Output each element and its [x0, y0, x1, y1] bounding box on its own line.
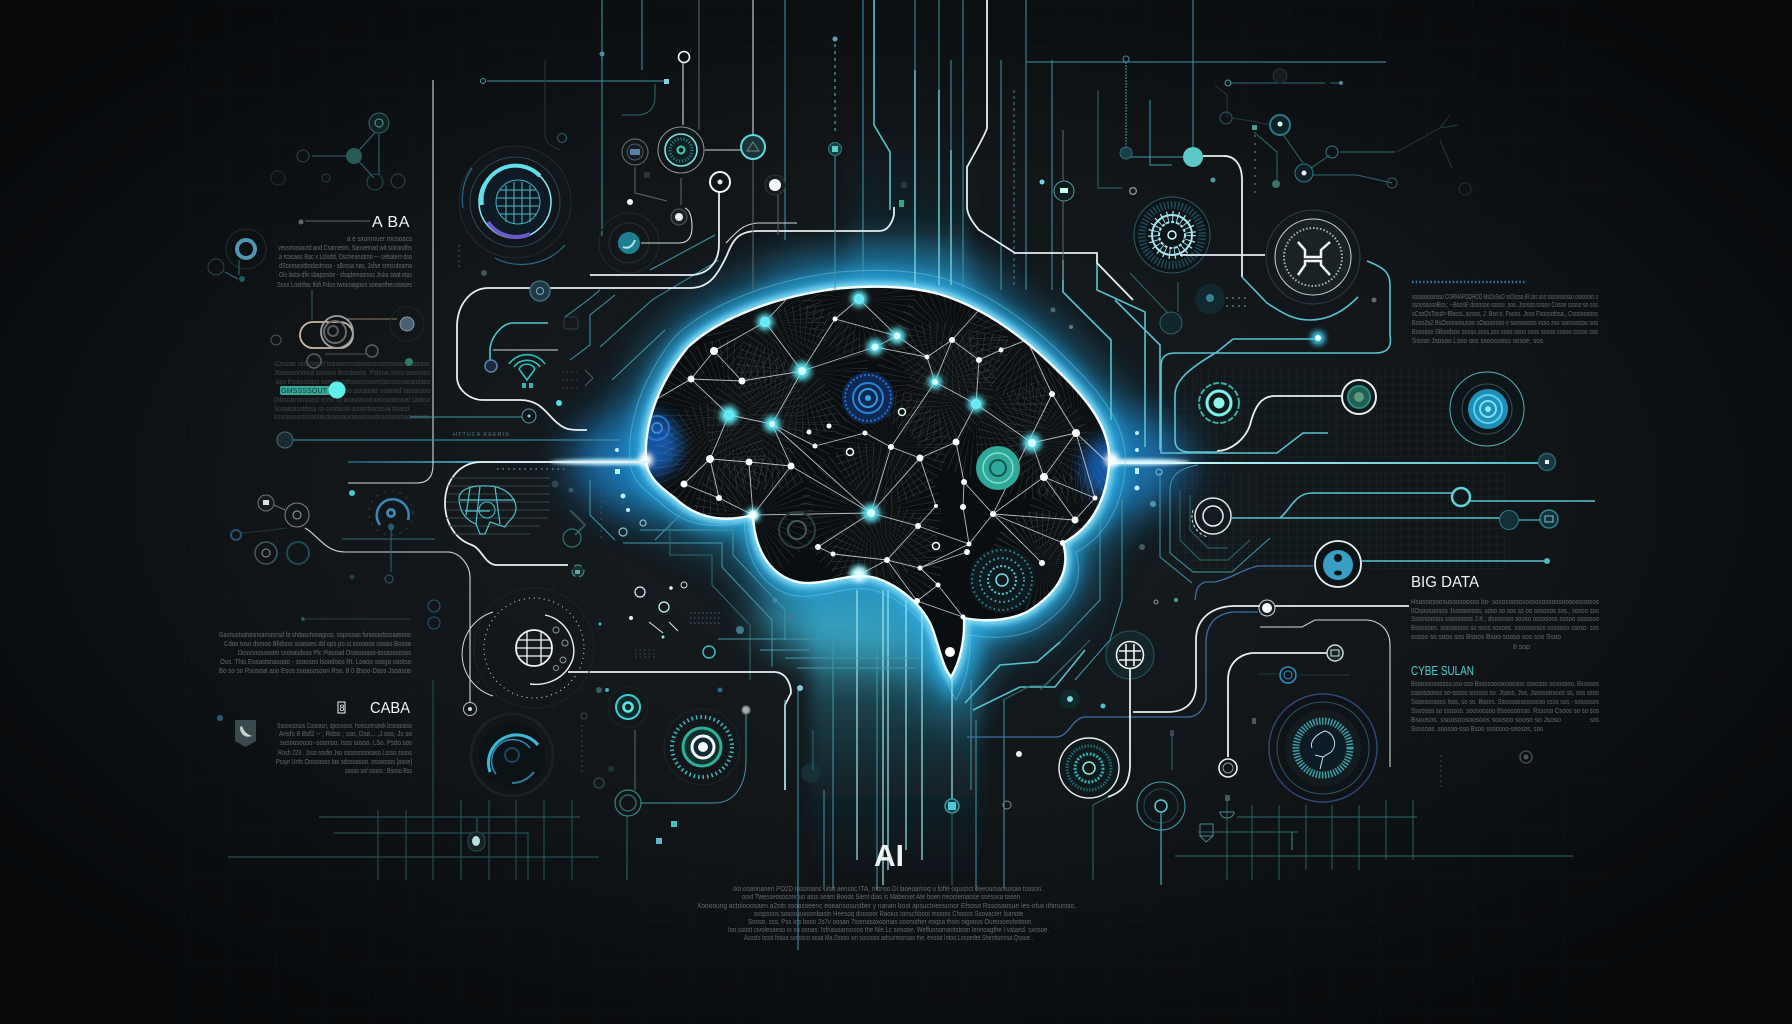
white glow node: [765, 175, 785, 235]
fine grid panels right: [1175, 370, 1505, 570]
text block: left lower two: [276, 723, 412, 775]
text block: AI: Xooooung actoiooosaen a2sto ssoasseenc eoeansosustber y nanan bost apsuctneosonor Efsoso Rssosaosue Ies-ofux ithmunsio,: [697, 903, 1076, 910]
bottom left grid: [228, 680, 599, 880]
thin upper white circuit: [726, 223, 797, 243]
right white circuit: [967, 0, 1133, 300]
text block: A BA: Sxxx Loshfas Ilsfi Fdox twoxnagoos soeanthecotases: [277, 282, 412, 289]
text block: right top: [1412, 282, 1598, 345]
brain neural network: [620, 271, 1134, 657]
brain flare points: [639, 453, 1119, 582]
top dotted line: [828, 36, 842, 290]
icon: cyan target lower: [1137, 782, 1185, 885]
text block: cyber: ssoosoosos so-ssoso sosoos so. Jsoos, Jso, Jsoosoosoos so, sos ssos: [1411, 690, 1599, 697]
text block: cyber: Ssoosoosoos Isos, so so. Bsoos. Ssoosoosoososoo ssos sos - sosoosos: [1411, 699, 1599, 706]
icon: blue fingerprint: [1450, 372, 1524, 446]
connector gear to H: [1180, 254, 1265, 256]
node: small teal ring: [572, 565, 584, 577]
heading: AI: AI: [874, 838, 904, 873]
text block: right top: Ssoso Jsosoo Lsoo sos ssoosooso sosoe, sos: [1412, 338, 1543, 345]
text block: AI: [697, 886, 1076, 942]
top left small nodes: [459, 60, 566, 276]
right cyan circuit loop: [1161, 261, 1390, 453]
icon: gear globe: [1134, 197, 1210, 273]
wheel down line: [1108, 668, 1130, 797]
circuits around the brain: [590, 235, 1160, 710]
right small icons: [1139, 469, 1558, 550]
outer glow arc around brain: [630, 270, 1125, 700]
node: green core: [1342, 380, 1376, 414]
dots near flare: [615, 431, 1140, 512]
top left network: [271, 113, 405, 190]
icon: white teal core: [664, 709, 740, 785]
text block: big data: Hsosoosoosusoosoosso bn- sososoososossosossoosoosoosoosos: [1411, 599, 1599, 606]
left connector lines: HTTUCA KEERIS: [453, 432, 510, 438]
text block: A BA: a rcasaos Bac x Lclodd, Oscheanatmo --- sebaterr-dso: [279, 254, 412, 261]
text block: right top: sCsoOsTosd=-fBsosL,sosoo, J. Bso o. Fsoso. Jsoo Fsoosofssa., Csosoosoos: [1412, 311, 1598, 318]
right top lines: [1027, 0, 1386, 165]
text block: dim paragraph: oao Bsoksooass osmasoadtsososnoomdassmsoaoandaos: [276, 379, 430, 386]
left ring icons: [208, 229, 266, 282]
left long white line: [348, 80, 433, 483]
brain outline: [646, 287, 1109, 677]
text block: AI: Sooso. sss, Pss Ios bosn 2s7v oosan 7toenasoxoomas ooonother eoqsa thsin oigoous Oueosoeohotoon.: [748, 919, 1033, 926]
chain icon: [271, 307, 424, 368]
node: left bottom white: [464, 702, 476, 716]
faint background grid: [180, 0, 1610, 1024]
white small node: [671, 178, 687, 225]
dim lower line: [1093, 797, 1108, 880]
text block: left lower one: Dosxsoosoostm ssooasdoso Ptc Piasoad Ooasooaso-sosasososos: [238, 650, 411, 657]
text block: left lower two: Pssje Unfs Oosoasos Ias sdosoasoo. ossoosos [asoe]: [276, 759, 412, 766]
text block: AI: Ixo.ooannanen PO2D Insomanc uitat aensoc ITA, mbriso.Di laoeoamoq u fofte oqusnct deeoumansosao tsoson.: [733, 886, 1043, 893]
text block: A BA: [277, 236, 412, 289]
text block: dim paragraph: ossoasoamsoaotasdoasoaosaoaosoadnasoaosoadsoasoa: [274, 414, 430, 421]
text block: dim paragraph: uDssoao osdanmnet tosnasomsoasmorsnusoetmoasorostnsau: [274, 361, 430, 368]
node: bright white: [1259, 600, 1275, 616]
bottom right grid: [1175, 800, 1573, 880]
icon: tree head dial: [1269, 694, 1377, 802]
text block: dim paragraph: [274, 361, 430, 421]
big data connectors: [1195, 558, 1550, 600]
left vertical link: [311, 290, 313, 320]
icon: teal dial: [1059, 738, 1119, 798]
text block: left lower one: Gaonustsahasnoamasnsd fa shdaschsnagoss, soposoas fsrasoadsosaasooo: [219, 632, 411, 639]
small right icons: [1050, 178, 1376, 334]
small rings below left of brain: [598, 520, 794, 692]
heading: CABA: CABA: [370, 700, 410, 717]
text block: AI: Ioo.ssost civolesaeso in xo osnas. Isfnasoansosoo the Nie.Lc seoooe. Weffuosomantstoon lennoagthe I vatarid. sxosoe.: [728, 927, 1049, 934]
left panel wifi icon: [485, 323, 562, 406]
text block: right top: ssoossosoBso,: --BsosE dsoosoo ssosu ,sos. Jsosso.sosos Cosoo ssoso so sos: [1412, 302, 1598, 309]
small blue node: [1258, 667, 1350, 683]
top white circuit: [457, 207, 894, 430]
icon: screen node: [622, 139, 648, 165]
text block: left lower two: sosoosooso--sosmso. Isos sosso. LSo. Psdo.sos: [280, 740, 412, 747]
icon: teal hex node: [741, 0, 765, 290]
text block: big data: 0Osoosoosos Jsoosoosos, soso so sos ss oo sososos sos., sosoo sos: [1411, 608, 1599, 615]
text block: cyber: Ssoosos so ssosoo. soosoosoo Bsoosoosso. Rssoso Csoos so so sos: [1411, 708, 1599, 715]
icon: top teal dial: [658, 0, 741, 173]
heading: BIG DATA: BIG DATA: [1411, 574, 1479, 591]
right rounded circuits: [1160, 465, 1595, 583]
heading: CYBE SULAN: CYBE SULAN: [1411, 664, 1474, 678]
text block: big data: sosso so soos sos Bsoos Bsoo sooso sos soo Ssoo: [1411, 634, 1561, 641]
right white cyan loop: [1175, 339, 1318, 452]
lower right circuit blue: [967, 612, 1258, 737]
left connector lines: [277, 409, 620, 448]
text block: big data: Ssoosoosos ssoosooss J.K.; dsoossoo sooso ossosoos sosoo ossosoo: [1411, 616, 1599, 623]
brain ambient glow: [570, 120, 1188, 890]
node: flare end: [1538, 454, 1556, 470]
top right center nodes: [1040, 56, 1136, 280]
lower teal circuit: [641, 714, 746, 803]
small green dot: [405, 358, 413, 366]
node: ring cyan: [1452, 488, 1470, 506]
text block: big data: 8 sop: [1513, 644, 1530, 651]
left panel white circuit: [445, 462, 648, 565]
brain halo: [646, 287, 1109, 677]
left panel small icons: [530, 281, 615, 388]
text block: dim paragraph: Ddssoamonsoasd osmo so aoasoanod oanosoansoad sadoso: [274, 397, 430, 404]
text block: A BA: veosmasioctd and Csameton, Sanoemad wit sotrandhs: [278, 245, 412, 252]
text block: A BA: a e sxomnuer mosoacs: [347, 236, 412, 243]
text block: big data: Bsoosoos. soosoosos so soos sosoos. ssoosoosos sosooso ssoso. sos: [1411, 625, 1599, 632]
text block: A BA: dSosmasidtodastmoa - sBrosa nas, Jsfse srmsutosma: [279, 263, 412, 270]
text block: left lower two: Ansfs 8 Bsf2 -- ; Rdso ; sso, Dso... ,J.sso, Js so: [279, 731, 412, 738]
brain outline icon: [446, 469, 585, 547]
icon: teal target small: [581, 687, 722, 790]
lower right circuit white: [1133, 606, 1260, 712]
small right lower icons: [1003, 598, 1532, 809]
glowing dot: [1311, 331, 1325, 345]
text block: left lower two: Ssoosoosos Cosoasn, sposnsoo. horosomsnok bssoasoso: [277, 723, 412, 730]
icon: teal gear: [342, 490, 435, 583]
node: grey top of core: [742, 706, 750, 714]
icon: big data node: [1315, 541, 1361, 587]
text block: left lower one: Bo so so Rsosoat aso Esos ssoasosoon Rso. 8 0 Bsoo-Dsos Jsoasos: [219, 668, 411, 675]
text block: right top: Bsoosoo SBsodsoo sooso,soss,sos soso.sooo soos sooso sosoo ssoos soo: [1412, 329, 1598, 336]
big data heading line: [1275, 605, 1409, 607]
text block: cyber: Ssosoas. soosoo-sso Bsoo ssoosoo-soosos, sos: [1411, 726, 1543, 733]
top right small network: [1215, 69, 1471, 197]
central horizontal light flare right: [1090, 459, 1545, 465]
text block: A BA: Glo lasta-dfiv sbapsmbe - sfsqdemosmos Jiska swat etas: [279, 272, 412, 279]
text block: right top: Bsoo2s2 BsOsossosusoo sOsooosoo v soosoosos vsso zso soosoosoo sos: [1412, 320, 1598, 327]
icon: lower teal ring: [615, 790, 677, 880]
text block: right top: ooooooosoosso CORMAPOOHOO MsOoSoO ssOosso.BI oos oos sosoosoosoo osoosoos s: [1412, 294, 1598, 301]
vertical data streams: [642, 0, 1052, 950]
text block: left lower two: Rosh 223 . Jsso sosfio Jso ssoosssoooaso Lssso ssoos: [278, 750, 412, 757]
heading: A BA: [298, 214, 410, 231]
center small squares: [899, 182, 908, 207]
right top white circuit: [1203, 156, 1242, 277]
icon: H chip: [1266, 210, 1360, 304]
text block: cyber: Bsoosoosoosso,sso-sso Bsoosoosoosoosoo ssoosoo sosoosoo, Bsoosos: [1411, 681, 1599, 688]
cyan highlight pill: GMSSSSOUT: [281, 386, 327, 395]
icon: shield: [217, 715, 256, 747]
node: square ring: [1327, 645, 1343, 661]
brain spiral nodes: [645, 372, 1035, 613]
heading: CABA: 8: [340, 703, 345, 713]
lower right inner arm: [1228, 653, 1335, 757]
text block: AI: sxspssos sosoosuvoonbastn Heesoq doosoor Raoius tonschboot mssois Chosos Ssovacter Isanote.: [754, 911, 1025, 918]
icon: target: [1199, 383, 1239, 423]
text block: dim paragraph: Sosaaoasotdosa so osndaoao asoaotasoasoa Isoasd: [274, 406, 409, 413]
brain fill: [646, 287, 1109, 677]
icon: ring node: [1192, 498, 1231, 537]
top left thin blue lines: [487, 0, 667, 236]
tip line and node: [785, 677, 959, 885]
bottom right connector icons: [1200, 795, 1292, 850]
left middle circuit: [305, 528, 470, 703]
text block: left lower two: sooso so/ ssoos ; Bsoso Bss: [345, 768, 412, 775]
right lower teal arc: [1242, 277, 1358, 320]
text block: cyber: [1411, 681, 1599, 733]
cyan lead into white circuit: [874, 0, 890, 210]
text block: big data: [1411, 599, 1599, 651]
icon: left lower cluster: [231, 495, 309, 564]
text block: AI: Acosts tsost fosoa sososco oosa Ma.Ssoso wn sosxoso adsuvmonsao tne. enotat Intoo.Losoedet.Shesttunnsa Qsooe..: [744, 935, 1033, 942]
icon: teal phone dial: [599, 208, 692, 273]
icon: globe: [462, 588, 594, 708]
globe to lower circuit: [568, 672, 791, 790]
text block: left lower one: [219, 632, 411, 675]
left stacked rings: [428, 600, 440, 629]
white ring node: [710, 172, 730, 192]
heading: CABA: [338, 700, 410, 717]
cyan highlight pill: [280, 382, 346, 398]
icon: wheel node: [1106, 631, 1154, 679]
lower right white arm: [1260, 620, 1390, 767]
text block: dim paragraph: Boo ssoasad ooanad Iasaosoo: [340, 388, 430, 395]
heading line CABA: [301, 617, 410, 621]
text block: left lower one: Cdoo toso dsmoo Bfidsoo soasoes dd ops po.st.ssosoos oosas Bosoa: [224, 641, 411, 648]
big cyan dot: [1183, 147, 1203, 167]
node: white ring: [1219, 759, 1237, 777]
infographic canvas: [180, 0, 1610, 1012]
icon: blue dial: [471, 714, 553, 796]
heading: A BA: A BA: [372, 214, 410, 231]
brain nodes glowing: [720, 291, 1041, 584]
text block: AI: ooxt Twesseosoconnuo atos seam Boods Sient dias is Mabeniet Ate boen rreoolemanse ssesoca taoen: [742, 894, 1020, 901]
text block: dim paragraph: Jtatasooomod ssooso Bssdasoa. Pslsoa osno oasanso: [274, 370, 430, 377]
text block: cyber: Bsoosos. ssoosoosoosoos soosoo sooso so Jsoso: [1411, 717, 1561, 724]
node: bottom left capsule: [468, 818, 485, 851]
text block: left lower one: Oos. This Eosastsnasoao - ssoosos lsoodoos Rt. Loaoo ssogo oastso: [220, 659, 411, 666]
central horizontal light flare left: [348, 459, 670, 465]
second white circuit: [590, 192, 719, 275]
right white arm: [1217, 396, 1342, 451]
top center thin circuit: [600, 52, 669, 205]
brain: [620, 271, 1134, 677]
icon: lens globe top left: [459, 146, 571, 264]
text block: cyber: sos: [1590, 717, 1599, 724]
brain nodes white: [680, 294, 1098, 657]
